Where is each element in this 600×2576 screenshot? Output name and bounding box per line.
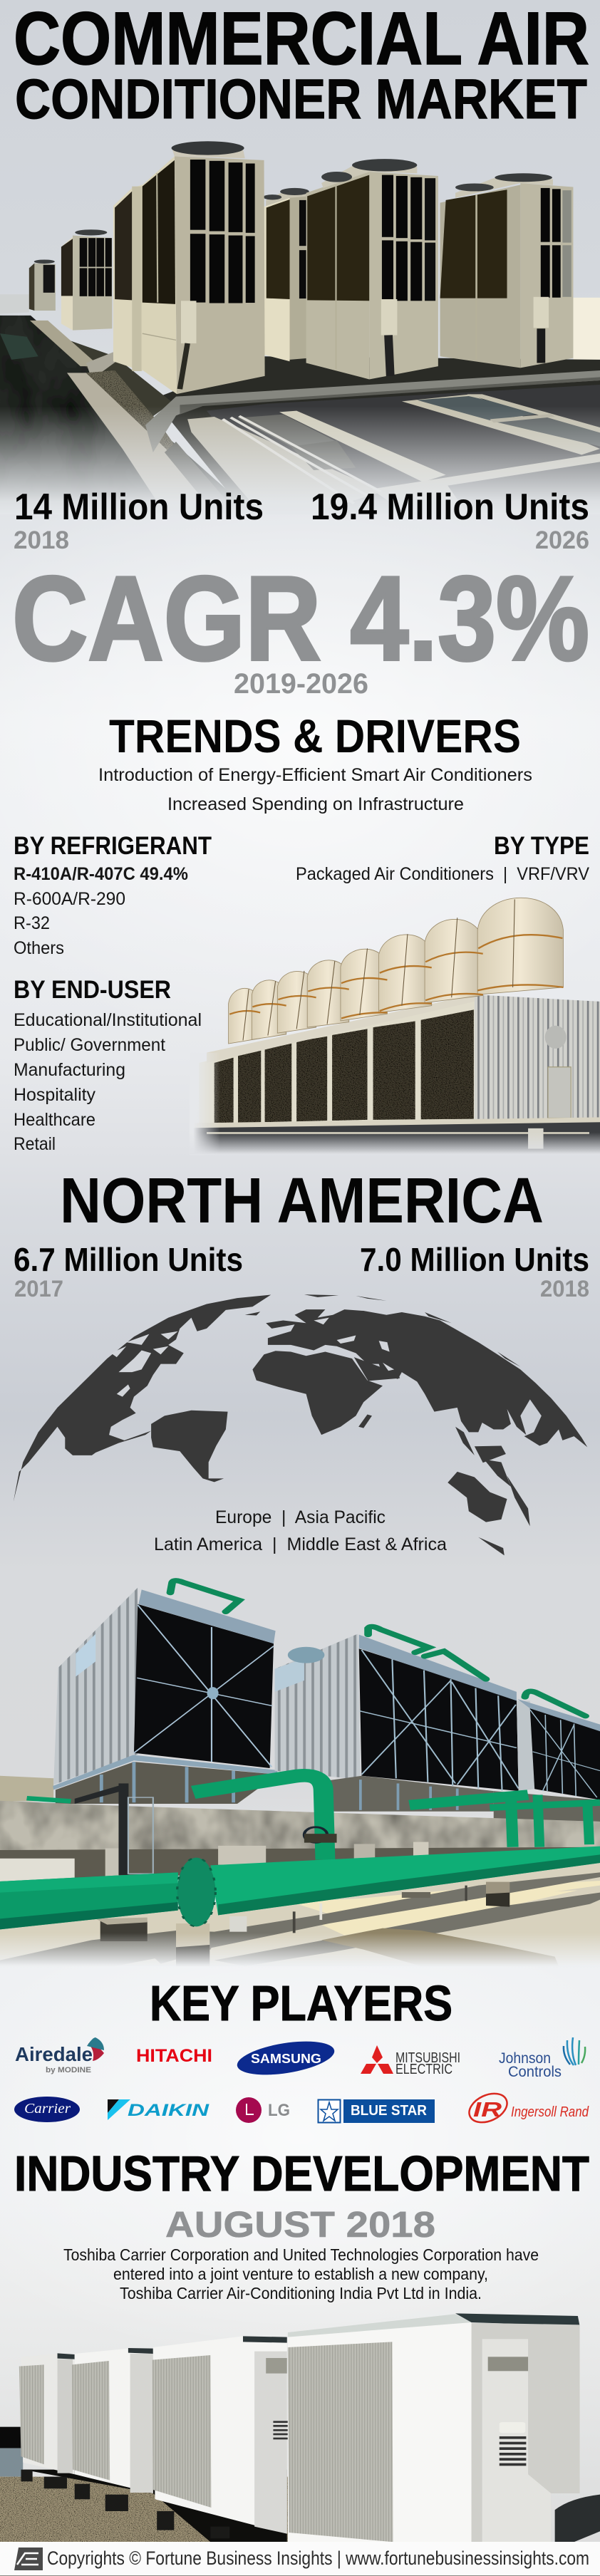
unit four [19,2353,75,2474]
logo: Samsung [235,2035,336,2081]
heading: key players: KEY PLAYERS [150,1975,452,2031]
by end-user: Manufacturing [14,1060,125,1080]
logo: Johnson Controls: Johnson [499,2050,551,2067]
footer band [0,2542,600,2576]
tower one [53,1588,277,1804]
CAGR: 2019-2026 [234,668,368,700]
unit behind centre [263,188,309,361]
market size 2026 [311,487,589,554]
by refrigerant: R-600A/R-290 [14,889,125,909]
logo: LG [236,2097,290,2123]
development text: entered into a joint venture to establish a new company, [113,2265,488,2283]
heading: trends and drivers: TRENDS & DRIVERS [109,710,521,762]
logo: Carrier [14,2097,80,2122]
logo: Daikin [108,2099,210,2120]
floor and shadows [0,1847,600,1966]
logo: Daikin: DAIKIN [128,2101,210,2120]
logo: Airedale [15,2037,104,2074]
by end-user: BY END-USER [14,976,171,1004]
logo: Blue Star [318,2099,435,2123]
market size 2018: 2018 [14,526,69,554]
unit big left [113,141,265,394]
unit centre [306,159,438,379]
logo: Ingersoll Rand: IR [473,2099,502,2121]
development text [63,2245,539,2302]
drums [229,898,563,1044]
heading: north america: NORTH AMERICA [60,1165,544,1237]
heading: trends and drivers [98,710,532,814]
unit three [72,2348,153,2493]
by end-user: Healthcare [14,1110,95,1130]
logo: Blue Star: BLUE STAR [351,2103,428,2119]
unit one [288,2313,600,2542]
logo: Airedale: Airedale [15,2043,93,2065]
main green pipe [0,1872,178,1929]
north america 2017: 6.7 Million Units [14,1241,243,1278]
north america 2017 [14,1241,243,1302]
by type: BY TYPE [494,832,589,860]
by refrigerant: R-32 [14,913,50,933]
development text: Toshiba Carrier Corporation and United Technologies Corporation have [63,2245,539,2264]
logo: Airedale: by MODINE [46,2066,91,2074]
logo: Ingersoll Rand [465,2088,589,2128]
by refrigerant [14,832,212,958]
heading: industry development: AUGUST 2018 [165,2204,435,2245]
photo: rooftop air conditioner units [0,141,600,514]
unit right [440,173,573,368]
north america 2018 [360,1241,589,1302]
market size 2018 [14,487,264,554]
by refrigerant: Others [14,938,64,958]
logo: LG: LG [268,2101,290,2120]
north america 2018: 2018 [540,1276,589,1302]
by end-user: Educational/Institutional [14,1010,202,1030]
green elbow pipe [27,1775,600,1860]
logo: Johnson Controls: Controls [508,2064,562,2080]
logo: Johnson Controls [499,2037,585,2080]
footer logo [14,2548,43,2570]
title [14,0,589,130]
market size 2026: 2026 [535,526,589,554]
unit second left [61,229,112,331]
unit far left [29,259,56,311]
regions list: Latin America | Middle East & Africa [154,1534,447,1554]
tower three [494,1699,600,1822]
regions list [154,1507,447,1554]
unit two [152,2336,288,2534]
logo: Mitsubishi Electric: ELECTRIC [395,2062,452,2077]
by type [296,832,589,884]
north america 2017: 2017 [14,1276,63,1302]
by end-user: Retail [14,1134,56,1154]
logo: Mitsubishi Electric [361,2045,460,2077]
logo: Samsung: SAMSUNG [251,2052,321,2066]
heading: trends and drivers: Introduction of Energy-Efficient Smart Air Conditioners [98,765,532,785]
logo: Hitachi: HITACHI [136,2046,212,2066]
world map globe [14,1294,587,1555]
by end-user: Hospitality [14,1085,95,1105]
market size 2018: 14 Million Units [14,487,264,528]
heading: industry development [14,2146,589,2245]
photo: green pipes and cooling towers [0,1581,600,1966]
by end-user [14,976,202,1154]
regions list: Europe | Asia Pacific [215,1507,386,1527]
logo: Mitsubishi Electric: MITSUBISHI [395,2050,460,2066]
tower two [275,1634,519,1812]
by refrigerant: R-410A/R-407C 49.4% [14,864,188,884]
development text: Toshiba Carrier Air-Conditioning India Pvt Ltd in India. [120,2284,482,2302]
logo: Carrier: Carrier [24,2101,71,2117]
top pipes [170,1581,586,1716]
by type: Packaged Air Conditioners | VRF/VRV [296,864,589,884]
photo: cooling tower with cream drums [190,898,600,1155]
photo: outdoor split units [0,2313,600,2542]
concrete wall [0,1801,600,1850]
heading: trends and drivers: Increased Spending on Infrastructure [167,794,464,814]
by refrigerant: BY REFRIGERANT [14,832,212,860]
by end-user: Public/ Government [14,1035,165,1055]
